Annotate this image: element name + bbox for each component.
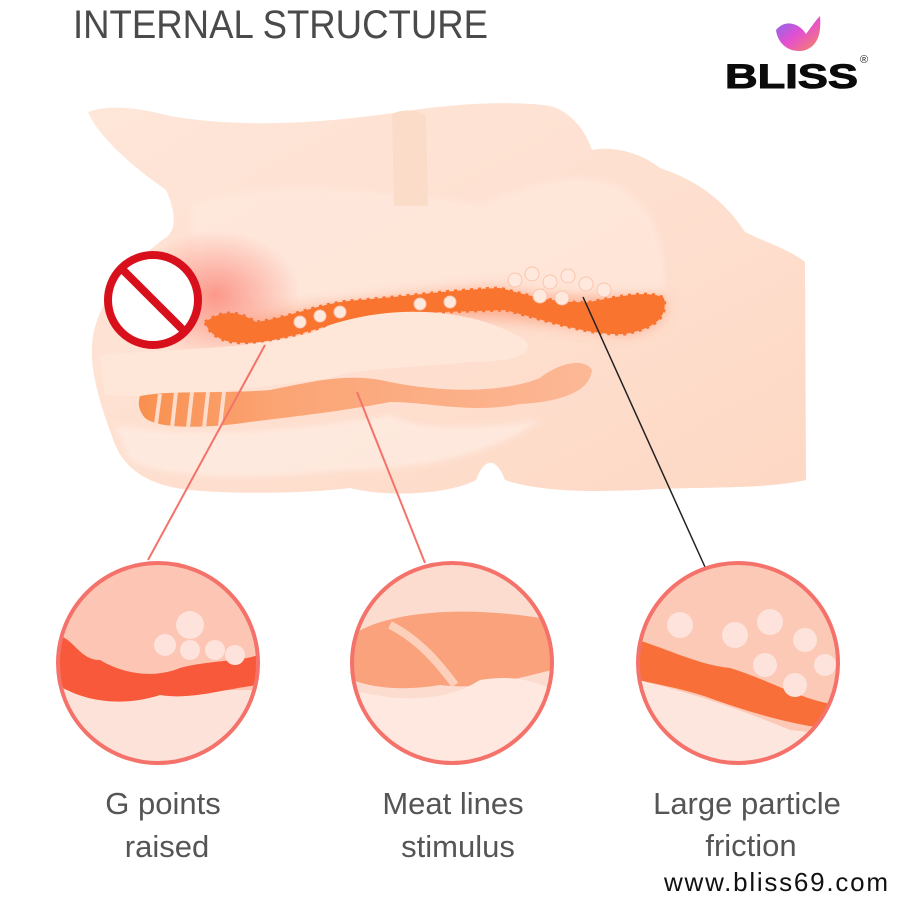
divider ridge xyxy=(100,312,528,396)
detail circle: G points xyxy=(58,563,258,763)
upper channel glow xyxy=(205,288,665,338)
icon: logo swirl xyxy=(776,16,820,51)
detail circle: Meat lines xyxy=(352,563,552,763)
pointer line: G points xyxy=(148,345,265,560)
icon: prohibition sign xyxy=(108,255,198,345)
upper layer highlight xyxy=(190,178,665,300)
lower channel xyxy=(139,363,592,427)
registered mark: ® xyxy=(860,54,868,66)
caption: Large particle friction xyxy=(653,786,841,863)
product body xyxy=(88,103,806,494)
website url: www.bliss69.com xyxy=(663,867,888,897)
title: INTERNAL STRUCTURE xyxy=(73,3,488,47)
bumps on upper channel xyxy=(294,267,611,328)
pink glow at left opening xyxy=(130,230,300,360)
brand logo xyxy=(725,16,868,96)
product cross-section xyxy=(88,103,806,494)
band detail xyxy=(392,110,428,206)
pointer line: meat lines xyxy=(357,392,425,563)
pointer line: large particle xyxy=(583,297,705,567)
caption: Meat lines stimulus: Meat lines xyxy=(382,786,524,821)
logo wordmark: BLISS xyxy=(725,58,858,96)
caption: G points raised xyxy=(105,786,221,864)
caption: Meat lines stimulus xyxy=(382,786,524,864)
lower body highlight xyxy=(115,415,540,477)
lower channel ribs xyxy=(156,392,224,428)
caption: Large particle friction: Large particle xyxy=(653,786,841,821)
caption: G points raised: G points xyxy=(105,786,221,821)
caption: Large particle friction: friction xyxy=(705,828,797,863)
caption: Meat lines stimulus: stimulus xyxy=(401,829,515,864)
detail circle: Large particle xyxy=(638,563,838,763)
caption: G points raised: raised xyxy=(125,829,209,864)
upper channel xyxy=(205,288,665,343)
